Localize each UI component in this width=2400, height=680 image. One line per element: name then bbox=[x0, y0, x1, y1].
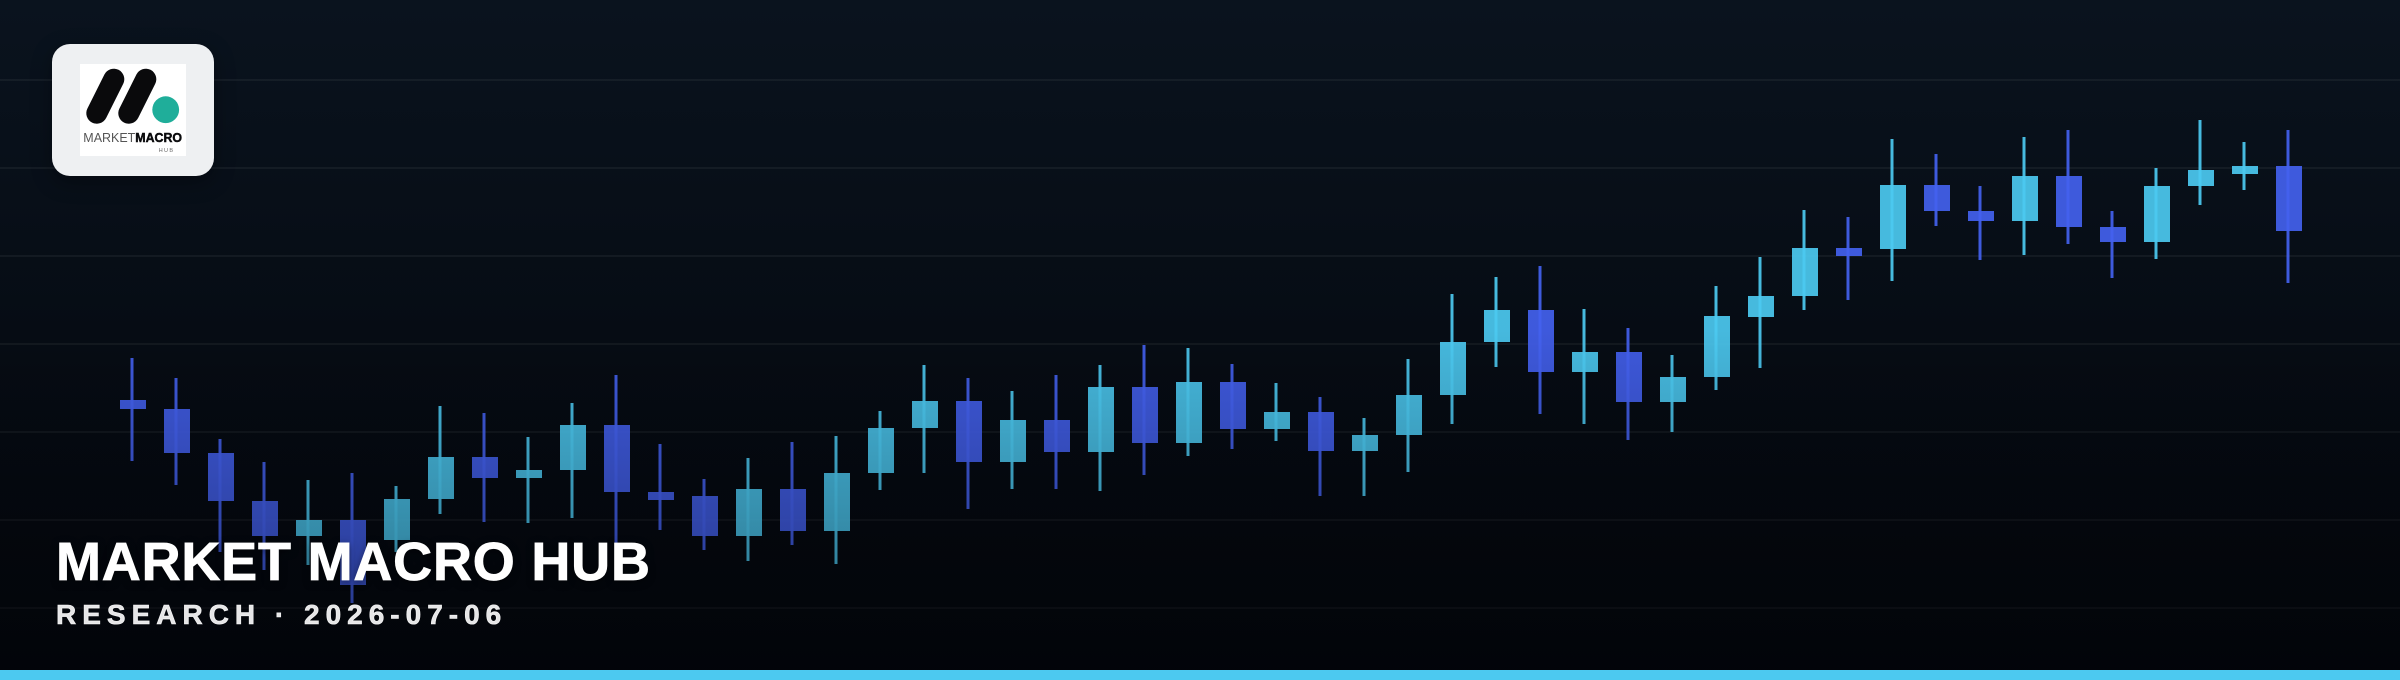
candle 42 bbox=[1924, 154, 1950, 226]
candle 5 bbox=[296, 480, 322, 565]
candle 15 bbox=[736, 458, 762, 561]
candle 31 bbox=[1440, 294, 1466, 424]
candle 26 bbox=[1220, 364, 1246, 449]
candle 28 bbox=[1308, 397, 1334, 496]
candle 12 bbox=[604, 375, 630, 543]
candle 50 bbox=[2276, 130, 2302, 283]
candle 45 bbox=[2056, 130, 2082, 244]
candle 17 bbox=[824, 436, 850, 564]
candle 49 bbox=[2232, 142, 2258, 190]
candle 27 bbox=[1264, 383, 1290, 441]
candle 22 bbox=[1044, 375, 1070, 489]
candle 10 bbox=[516, 437, 542, 523]
candle 3 bbox=[208, 439, 234, 552]
candle 2 bbox=[164, 378, 190, 485]
logo mark: two slanted pills bbox=[97, 79, 146, 113]
candle 13 bbox=[648, 444, 674, 530]
candle 1 bbox=[120, 358, 146, 461]
candle 48 bbox=[2188, 120, 2214, 205]
candle 35 bbox=[1616, 328, 1642, 440]
candle 7 bbox=[384, 486, 410, 552]
candle 8 bbox=[428, 406, 454, 514]
candle 47 bbox=[2144, 168, 2170, 259]
candle 11 bbox=[560, 403, 586, 518]
candle 14 bbox=[692, 479, 718, 550]
title: MARKET MACRO HUB bbox=[56, 532, 651, 592]
candle 29 bbox=[1352, 418, 1378, 496]
logo card bbox=[52, 44, 214, 176]
logo wordmark: MARKETMACRO bbox=[83, 131, 182, 145]
candle 4 bbox=[252, 462, 278, 570]
logo sub-wordmark: HUB bbox=[159, 148, 173, 154]
logo white tile bbox=[80, 64, 186, 156]
candle 25 bbox=[1176, 348, 1202, 456]
candle 6 bbox=[340, 473, 366, 603]
candle 23 bbox=[1088, 365, 1114, 491]
candlestick chart bbox=[120, 120, 2302, 603]
candle 18 bbox=[868, 411, 894, 490]
candle 40 bbox=[1836, 217, 1862, 300]
candle 24 bbox=[1132, 345, 1158, 475]
candle 44 bbox=[2012, 137, 2038, 255]
candle 9 bbox=[472, 413, 498, 522]
bottom accent bar bbox=[0, 670, 2400, 680]
candle 19 bbox=[912, 365, 938, 473]
candle 32 bbox=[1484, 277, 1510, 367]
candle 46 bbox=[2100, 211, 2126, 278]
candle 20 bbox=[956, 378, 982, 509]
candle 21 bbox=[1000, 391, 1026, 489]
candle 34 bbox=[1572, 309, 1598, 424]
candle 30 bbox=[1396, 359, 1422, 472]
candle 16 bbox=[780, 442, 806, 545]
candle 37 bbox=[1704, 286, 1730, 390]
subtitle: RESEARCH · 2026-07-06 bbox=[56, 599, 507, 630]
candle 36 bbox=[1660, 355, 1686, 432]
candle 38 bbox=[1748, 257, 1774, 368]
candle 41 bbox=[1880, 139, 1906, 281]
candle 33 bbox=[1528, 266, 1554, 414]
candle 39 bbox=[1792, 210, 1818, 310]
candle 43 bbox=[1968, 186, 1994, 260]
logo mark: teal dot bbox=[152, 96, 179, 123]
